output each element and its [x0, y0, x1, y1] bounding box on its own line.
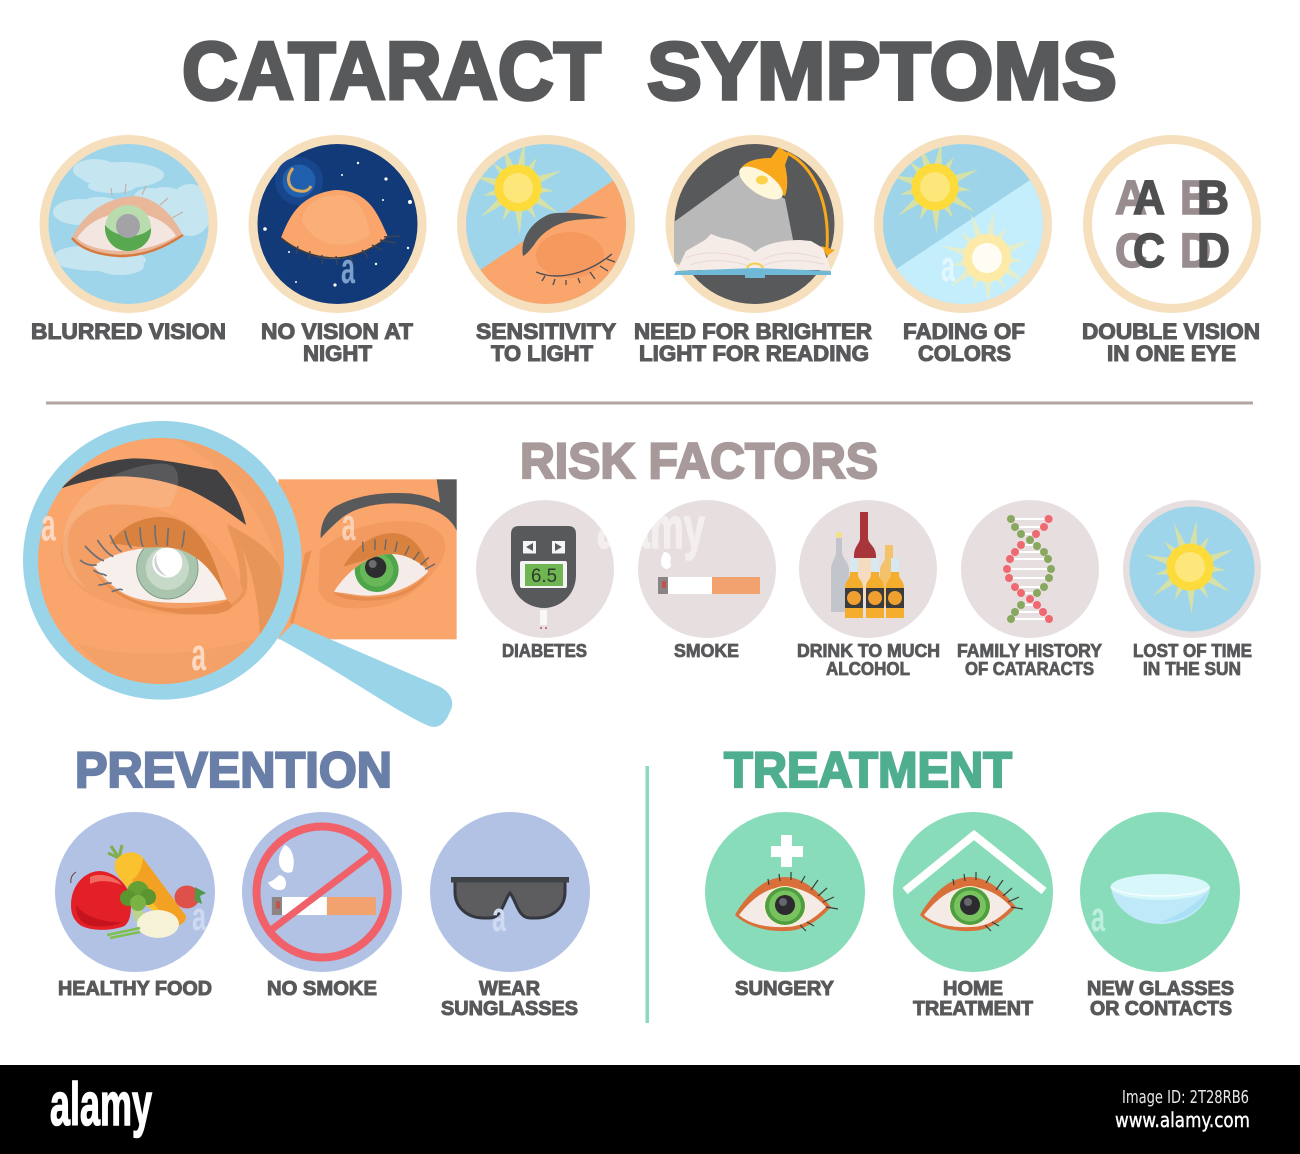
label: brighter light for reading: NEED FOR BRIGHTER [634, 319, 872, 344]
icon: surgery eye with cross [705, 812, 865, 972]
label: home treatment: HOME [943, 978, 1003, 1000]
illustration: magnifying glass over eye [23, 421, 457, 727]
icon: double vision: C [1115, 225, 1147, 278]
title [182, 26, 1117, 117]
icon: alcohol bottles [799, 500, 937, 638]
heading: prevention: PREVENTION [75, 742, 392, 798]
footer image id: Image ID: 2T28RB6 [1122, 1087, 1249, 1108]
label: new glasses or contacts [1087, 978, 1234, 1020]
watermark: a [941, 242, 955, 291]
label: sensitivity to light [476, 319, 616, 366]
label: family history: FAMILY HISTORY [957, 641, 1102, 661]
watermark: a [492, 893, 506, 940]
label: smoke: SMOKE [674, 641, 739, 661]
icon: healthy food [55, 812, 215, 972]
label: home treatment [913, 978, 1033, 1020]
icon: sun exposure [1123, 500, 1261, 638]
magnifier handle [278, 623, 452, 727]
label: sun [1133, 641, 1252, 679]
watermark: alamy [597, 496, 705, 561]
icon: contact lens [1080, 812, 1240, 972]
icon: no smoking sign [242, 812, 402, 972]
label: alcohol: ALCOHOL [826, 659, 910, 679]
label: sun: IN THE SUN [1143, 659, 1241, 679]
label: no smoke: NO SMOKE [267, 978, 377, 1000]
icon: no vision at night [253, 140, 422, 308]
label: sensitivity to light: TO LIGHT [491, 341, 594, 366]
small healthy eye panel [278, 479, 457, 639]
watermark: a [192, 895, 206, 939]
panel: risk factors row [476, 496, 1261, 679]
icon: double vision: A [1133, 172, 1165, 225]
watermark: a [1091, 893, 1105, 940]
heading: risk factors: RISK FACTORS [520, 433, 878, 489]
icon: double vision: B [1180, 172, 1211, 225]
panel: symptoms row [31, 140, 1260, 366]
footer url: www.alamy.com [1115, 1108, 1250, 1132]
label: alcohol [797, 641, 940, 679]
panel: prevention [55, 812, 590, 1020]
label: family history [957, 641, 1102, 679]
label: no vision at night [261, 319, 414, 366]
label: sun: LOST OF TIME [1133, 641, 1252, 661]
icon: fading of colors [878, 140, 1060, 320]
label: brighter light for reading [634, 319, 872, 366]
watermark: a [342, 499, 356, 550]
icon: double vision: C [1133, 225, 1165, 278]
icon: need for brighter light [670, 140, 839, 308]
label: sensitivity to light: SENSITIVITY [476, 319, 616, 344]
label: surgery: SUNGERY [735, 978, 835, 1000]
icon: blurred vision [44, 140, 213, 308]
label: double vision: IN ONE EYE [1107, 341, 1236, 366]
watermark: a [341, 244, 355, 293]
label: brighter light for reading: LIGHT FOR READING [639, 341, 869, 366]
label: home treatment: TREATMENT [913, 998, 1033, 1020]
label: family history: OF CATARACTS [965, 659, 1094, 679]
label: double vision [1082, 319, 1260, 366]
title: CATARACT [182, 26, 601, 117]
label: diabetes: DIABETES [502, 641, 587, 661]
magnifier lens [23, 421, 302, 710]
icon: double vision: D [1180, 225, 1211, 278]
icon: glucose meter: 6.5 [531, 566, 557, 587]
icon: double vision: B [1197, 172, 1229, 225]
panel: treatment [705, 812, 1240, 1020]
label: no vision at night: NO VISION AT [261, 319, 414, 344]
watermark: a [41, 500, 56, 551]
label: blurred vision: BLURRED VISION [31, 319, 226, 344]
label: alcohol: DRINK TO MUCH [797, 641, 940, 661]
icon: DNA helix [961, 500, 1099, 638]
label: wear sunglasses [441, 978, 578, 1020]
label: no vision at night: NIGHT [303, 341, 373, 366]
footer bar [0, 1065, 1300, 1154]
heading: treatment: TREATMENT [724, 742, 1012, 798]
icon: cigarette [597, 496, 776, 638]
label: fading of colors: FADING OF [903, 319, 1025, 344]
label: double vision: DOUBLE VISION [1082, 319, 1260, 344]
label: fading of colors: COLORS [918, 341, 1011, 366]
icon: home treatment [893, 812, 1053, 972]
label: new glasses or contacts: NEW GLASSES [1087, 978, 1234, 1000]
icon: double vision [1088, 140, 1256, 308]
label: new glasses or contacts: OR CONTACTS [1090, 998, 1232, 1020]
footer logo: alamy [50, 1071, 152, 1138]
watermark: a [191, 629, 207, 680]
label: healthy food: HEALTHY FOOD [58, 978, 212, 1000]
icon: glucose meter [476, 500, 614, 638]
label: fading of colors [903, 319, 1025, 366]
icon: sunglasses [430, 812, 590, 972]
title: SYMPTOMS [647, 26, 1117, 117]
icon: sensitivity to light [462, 140, 640, 320]
icon: double vision: D [1197, 225, 1230, 278]
label: wear sunglasses: WEAR [479, 978, 541, 1000]
label: wear sunglasses: SUNGLASSES [441, 998, 578, 1020]
icon: double vision: A [1115, 172, 1147, 225]
